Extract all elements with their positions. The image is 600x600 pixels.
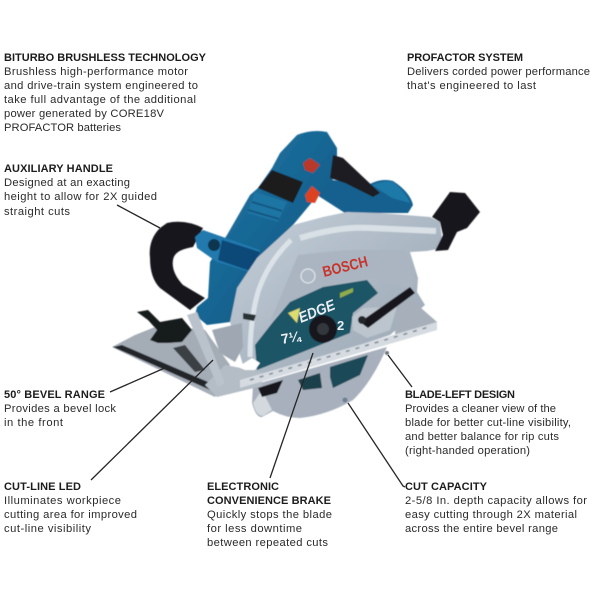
text: biturbo brushless technology: BITURBO BRUSHLESS TECHNOLOGY (4, 52, 207, 64)
callout lines (91, 205, 412, 487)
base plate left (112, 325, 230, 397)
front lever (137, 310, 192, 343)
blue motor body (195, 131, 337, 325)
text: electronic convenience brake: Quickly stops the blade (207, 509, 332, 521)
saw illustration (112, 131, 480, 418)
edge green tag (340, 288, 353, 298)
text: cut capacity: across the entire bevel range (405, 523, 558, 535)
right truss (395, 300, 437, 335)
pipe highlight (300, 228, 436, 238)
text: electronic convenience brake (207, 481, 332, 549)
text: bevel range: 50° BEVEL RANGE (4, 389, 105, 401)
blade text: 2: 2 (337, 318, 344, 333)
depth lever (360, 287, 415, 328)
guard screw (301, 269, 315, 283)
base plate front (205, 365, 262, 397)
text: blade-left design (405, 389, 571, 457)
text: biturbo brushless technology: Brushless high-performance motor (4, 66, 188, 78)
text: bevel range: Provides a bevel lock (4, 403, 116, 415)
text: electronic convenience brake: CONVENIENCE BRAKE (207, 495, 331, 507)
text: electronic convenience brake: between repeated cuts (207, 537, 328, 549)
silver box (212, 323, 243, 362)
text: cut-line LED (4, 481, 137, 535)
logo: BOSCH: BOSCH (321, 253, 370, 281)
blade label (255, 280, 378, 370)
text: cut-line LED: cutting area for improved (4, 509, 137, 521)
dark mechanism (173, 345, 205, 372)
callout dots (385, 351, 389, 355)
text: blade-left design: blade for better cut-line visibility, (405, 417, 571, 429)
motor ribs (247, 192, 287, 222)
small hex (243, 313, 256, 321)
red trigger (305, 186, 320, 203)
text: profactor system: PROFACTOR SYSTEM (407, 52, 523, 64)
black grip inlay (330, 155, 380, 197)
text: profactor system: that's engineered to last (407, 80, 537, 92)
bracket strip (187, 312, 225, 387)
text: cut capacity: 2-5/8 In. depth capacity allows for (405, 495, 587, 507)
upper blade guard (230, 212, 443, 378)
text: cut-line LED: CUT-LINE LED (4, 481, 81, 493)
auxiliary handle (150, 222, 205, 310)
text: cut-line LED: Illuminates workpiece (4, 495, 121, 507)
lower guard cutouts (258, 380, 283, 397)
text: profactor system (407, 52, 590, 92)
dust port (432, 192, 480, 251)
rear blue housing (313, 178, 413, 213)
text: cut capacity: easy cutting through 2X material (405, 509, 577, 521)
line: cut-line LED (91, 360, 213, 480)
line: blade-left (388, 355, 412, 387)
blade text: EDGE: EDGE (296, 296, 339, 327)
silver bracket (352, 307, 397, 338)
text: blade-left design: BLADE-LEFT DESIGN (405, 389, 515, 401)
text: auxiliary handle: AUXILIARY HANDLE (4, 163, 113, 175)
text: auxiliary handle: Designed at an exacting (4, 177, 130, 189)
line: brake (270, 353, 313, 478)
text: bevel range: in the front (4, 417, 64, 429)
text: electronic convenience brake: for less downtime (207, 523, 302, 535)
text: biturbo brushless technology: power generated by CORE18V (4, 108, 165, 120)
white glint (238, 358, 260, 370)
text: bevel range (4, 389, 116, 429)
text: biturbo brushless technology: PROFACTOR batteries (4, 122, 121, 134)
blade size: 7¼ (280, 328, 303, 347)
line: bevel range (110, 367, 167, 392)
text: blade-left design: and better balance for rip cuts (405, 431, 559, 443)
text: cut capacity (405, 481, 587, 535)
vent housing (195, 230, 260, 272)
text: auxiliary handle (4, 163, 157, 218)
text: blade-left design: (right-handed operation) (405, 445, 530, 457)
inner panel (270, 250, 416, 322)
text: biturbo brushless technology (4, 52, 207, 134)
text: biturbo brushless technology: take full advantage of the additional (4, 94, 196, 106)
line: cut capacity (348, 403, 405, 487)
arbor knob (309, 315, 337, 343)
teeth strip (113, 345, 222, 393)
text: profactor system: Delivers corded power performance (407, 66, 590, 78)
black motor band (258, 170, 303, 203)
text: biturbo brushless technology: and drive-train system engineered to (4, 80, 198, 92)
red switch (303, 158, 320, 173)
lower blade guard (252, 347, 387, 418)
text: cut capacity: CUT CAPACITY (405, 481, 488, 493)
line: auxiliary handle (117, 205, 160, 228)
edge chevron (288, 308, 300, 323)
inner guard arc highlight (250, 240, 291, 357)
sharp saw details (280, 253, 370, 347)
text: auxiliary handle: straight cuts (4, 206, 70, 218)
text: electronic convenience brake: ELECTRONIC (207, 481, 279, 493)
text: cut-line LED: cut-line visibility (4, 523, 91, 535)
text: blade-left design: Provides a cleaner view of the (405, 403, 556, 415)
base strip (240, 322, 437, 388)
text: auxiliary handle: height to allow for 2X guided (4, 191, 157, 203)
